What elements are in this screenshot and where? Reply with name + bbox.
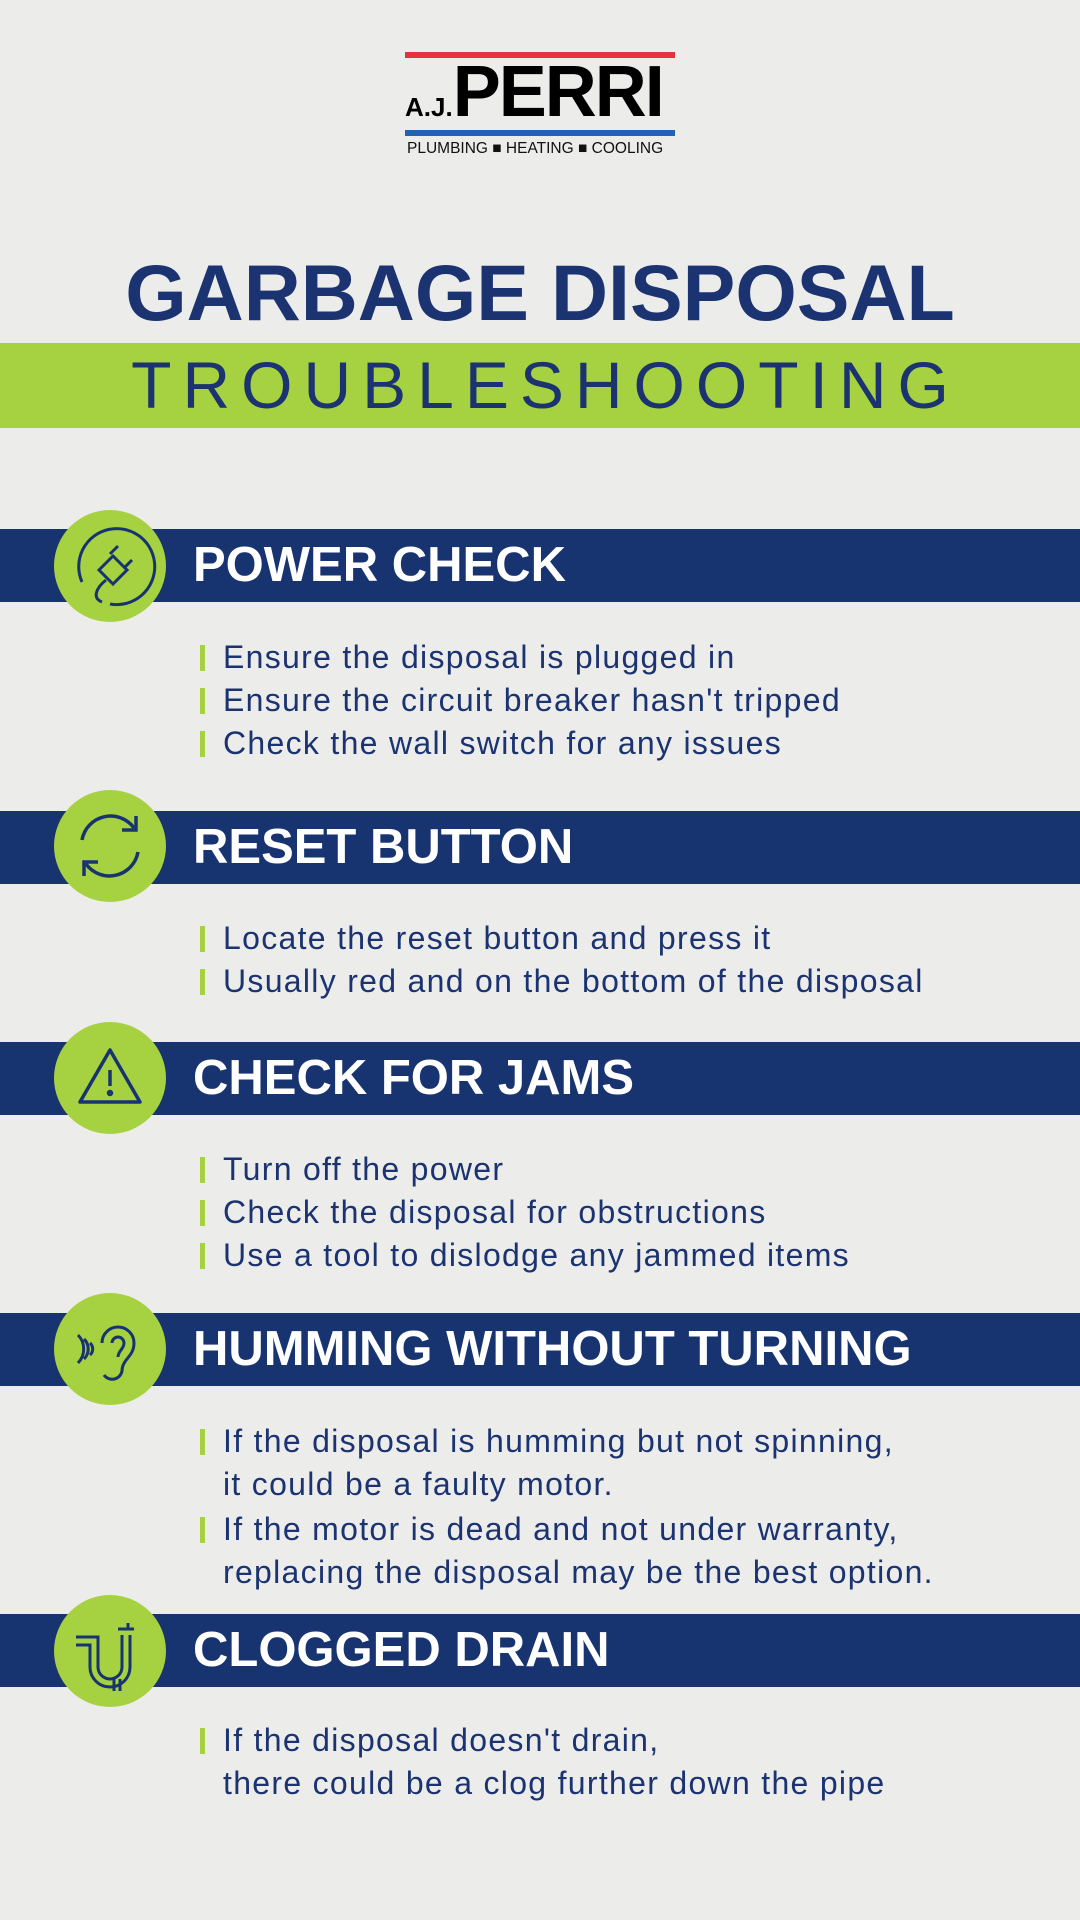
section: jams: [0, 1042, 1080, 1115]
section: power check: POWER CHECK: [193, 538, 566, 592]
bullets: power check: [200, 639, 841, 761]
bullets: jams: Turn off the power: [223, 1151, 504, 1187]
icon: ear: [54, 1293, 166, 1405]
section: jams: CHECK FOR JAMS: [193, 1051, 634, 1105]
section: power check: [0, 529, 1080, 602]
title: GARBAGE DISPOSAL: [125, 248, 955, 337]
bullets: humming: [200, 1423, 894, 1502]
subtitle band: TROUBLESHOOTING: [131, 348, 960, 422]
bullets: humming: If the disposal is humming but not spinning,: [223, 1423, 894, 1459]
subtitle band: [0, 343, 1080, 428]
icon: plug: [54, 510, 166, 622]
text: If the motor is dead and not under warranty,: [223, 1511, 899, 1547]
bullets: jams: [200, 1151, 850, 1273]
bullets: clogged: there could be a clog further down the pipe: [223, 1765, 886, 1801]
bullets: reset: [200, 920, 924, 999]
section: reset button: [0, 811, 1080, 884]
bullets: humming: it could be a faulty motor.: [223, 1466, 614, 1502]
section: reset button: RESET BUTTON: [193, 820, 573, 874]
icon: refresh: [54, 790, 166, 902]
bullets: reset: Usually red and on the bottom of the disposal: [223, 963, 924, 999]
bullets: power check: Ensure the disposal is plugged in: [223, 639, 736, 675]
bullets: power check: Ensure the circuit breaker hasn't tripped: [223, 682, 841, 718]
logo: PLUMBING ■ HEATING ■ COOLING: [407, 140, 663, 157]
logo: A.J.PERRI: [405, 52, 663, 132]
section: clogged drain: [0, 1614, 1080, 1687]
bullets: power check: Check the wall switch for any issues: [223, 725, 782, 761]
icon: pipe: [54, 1595, 166, 1707]
bullets: reset: Locate the reset button and press it: [223, 920, 771, 956]
section: humming: [0, 1313, 1080, 1386]
text: replacing the disposal may be the best option.: [223, 1554, 934, 1590]
section: humming: HUMMING WITHOUT TURNING: [193, 1322, 912, 1376]
bullets: jams: Use a tool to dislodge any jammed items: [223, 1237, 850, 1273]
section: clogged drain: CLOGGED DRAIN: [193, 1623, 610, 1677]
icon: warning: [54, 1022, 166, 1134]
bullets: clogged: If the disposal doesn't drain,: [223, 1722, 659, 1758]
bullets: jams: Check the disposal for obstructions: [223, 1194, 767, 1230]
bullets: clogged: [200, 1722, 886, 1801]
